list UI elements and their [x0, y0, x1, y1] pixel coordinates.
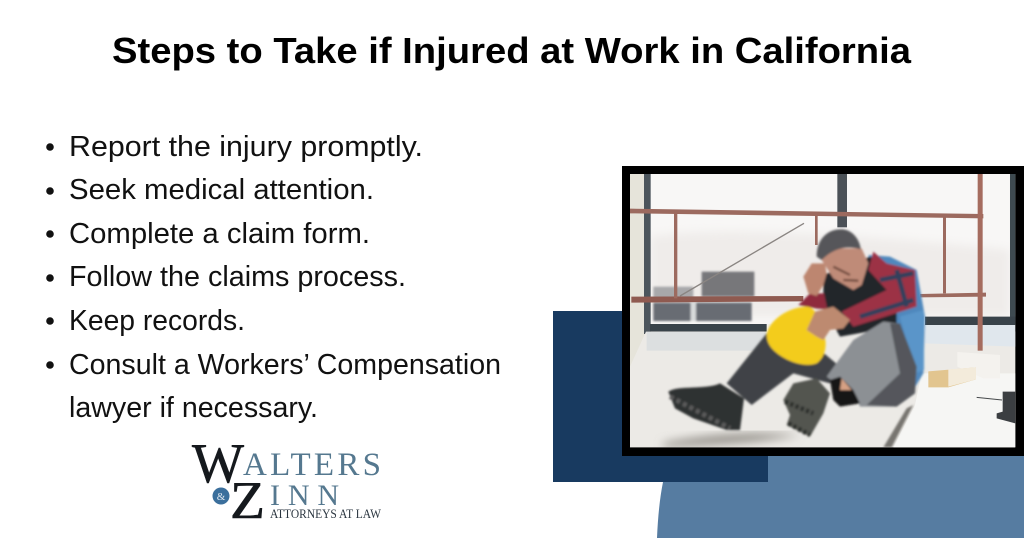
bullet item 2: Seek medical attention. [69, 174, 374, 206]
logo W: W [192, 433, 244, 495]
hand on forehead [803, 263, 827, 296]
scaffold rails [630, 174, 986, 351]
logo: Walters & Zinn [192, 433, 381, 530]
bullet item 6: Consult a Workers’ Compensation [69, 349, 501, 381]
bullet item 3: Complete a claim form. [69, 218, 370, 250]
worker [668, 229, 925, 437]
window [650, 174, 1010, 324]
bullet item 6 [46, 349, 501, 424]
rear leg [727, 333, 840, 405]
title: Steps to Take if Injured at Work in California [112, 30, 912, 71]
helmet [767, 307, 826, 365]
shape: navy square [553, 311, 768, 482]
vest back [868, 255, 925, 390]
bullet item 5: Keep records. [69, 305, 245, 337]
logo tagline: ATTORNEYS AT LAW [270, 507, 381, 521]
front leg [826, 320, 901, 408]
photo frame [622, 166, 1024, 456]
boots [668, 383, 744, 430]
bullet item 4: Follow the claims process. [69, 261, 406, 293]
bullet list [46, 131, 501, 424]
bricks and tools [957, 352, 1000, 378]
distant building [653, 272, 754, 321]
photo: injured worker sitting on the floor with a yellow helmet [630, 174, 1015, 447]
window frames [630, 174, 646, 367]
dark torso [823, 257, 897, 337]
shape: light blue curved block [657, 456, 1024, 538]
plaid shirt [842, 252, 917, 327]
floor [630, 332, 1015, 447]
head [822, 248, 868, 290]
logo ampersand badge: & [217, 491, 226, 503]
bullet item 1: Report the injury promptly. [69, 131, 423, 163]
logo INN: INN [270, 479, 339, 512]
bullet item 6: lawyer if necessary. [69, 392, 318, 424]
hand on helmet [807, 307, 850, 340]
logo ampersand badge [212, 488, 230, 504]
logo ALTERS: ALTERS [243, 447, 381, 483]
logo Z: Z [230, 472, 265, 530]
